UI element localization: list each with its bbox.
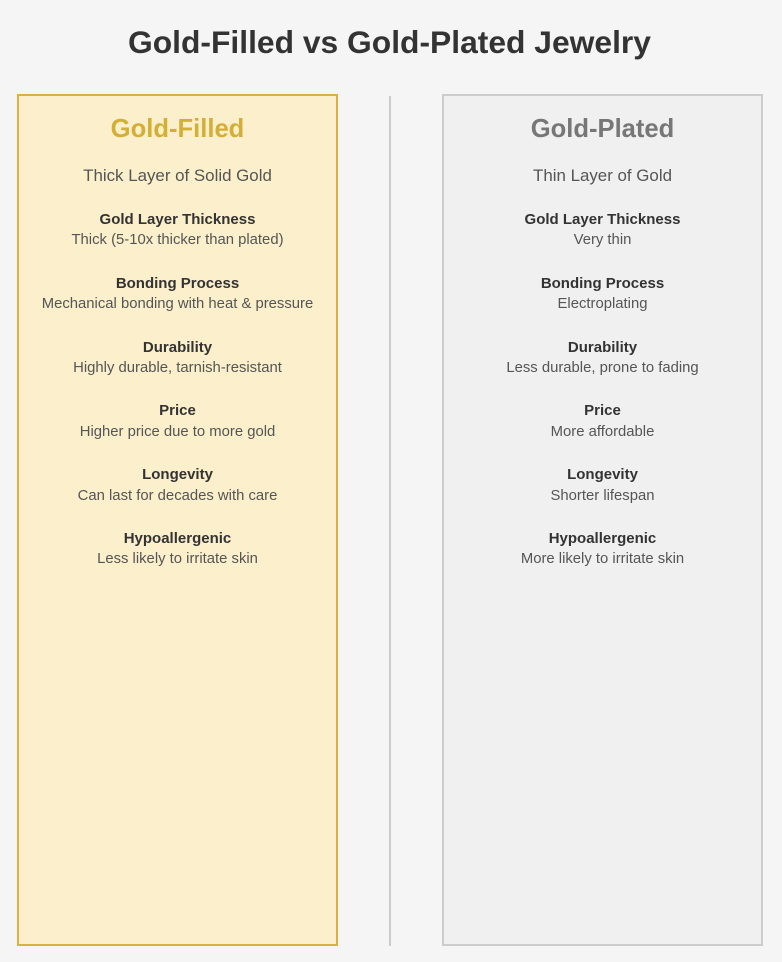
item: longevity: Can last for decades with care: [78, 488, 277, 504]
item: longevity: Longevity: [567, 466, 638, 483]
item: bonding process: Bonding Process: [116, 275, 239, 292]
item: gold layer thickness: [525, 211, 680, 248]
panel: gold-filled: [17, 94, 338, 946]
tagline: gold-plated: Thin Layer of Gold: [533, 166, 672, 185]
center divider: [389, 96, 391, 946]
item: price: Price: [159, 402, 196, 419]
item: price: Higher price due to more gold: [80, 424, 275, 440]
item: bonding process: Mechanical bonding with heat & pressure: [42, 296, 313, 312]
item: longevity: Longevity: [142, 466, 213, 483]
item: bonding process: [541, 275, 664, 312]
item: hypoallergenic: [521, 530, 684, 567]
item: durability: Less durable, prone to fading: [506, 360, 699, 376]
heading: gold-plated: Gold-Plated: [531, 115, 674, 143]
item: gold layer thickness: [71, 211, 284, 248]
item: durability: [506, 339, 699, 376]
item: bonding process: Bonding Process: [541, 275, 664, 292]
panel: gold-plated: [442, 94, 763, 946]
item: price: [551, 402, 654, 440]
title: Gold-Filled vs Gold-Plated Jewelry: [128, 24, 651, 60]
item: longevity: Shorter lifespan: [551, 488, 654, 504]
item: durability: Highly durable, tarnish-resistant: [73, 360, 282, 376]
item: hypoallergenic: Less likely to irritate skin: [97, 551, 258, 567]
item: hypoallergenic: Hypoallergenic: [549, 530, 656, 547]
item: hypoallergenic: More likely to irritate skin: [521, 551, 684, 567]
item: gold layer thickness: Very thin: [574, 232, 631, 248]
item: durability: [73, 339, 282, 376]
item: bonding process: [42, 275, 313, 312]
item: price: [80, 402, 275, 440]
item: price: More affordable: [551, 424, 654, 440]
item: hypoallergenic: [97, 530, 258, 567]
item: bonding process: Electroplating: [558, 296, 647, 312]
item: gold layer thickness: Gold Layer Thickness: [100, 211, 255, 228]
item: gold layer thickness: Thick (5-10x thicker than plated): [71, 232, 284, 248]
item: hypoallergenic: Hypoallergenic: [124, 530, 231, 547]
item: longevity: [551, 466, 654, 504]
item: price: Price: [584, 402, 621, 419]
item: durability: Durability: [568, 339, 637, 356]
item: gold layer thickness: Gold Layer Thickness: [525, 211, 680, 228]
heading: gold-filled: Gold-Filled: [111, 115, 244, 143]
item: durability: Durability: [143, 339, 212, 356]
tagline: gold-filled: Thick Layer of Solid Gold: [83, 166, 272, 185]
item: longevity: [78, 466, 277, 504]
